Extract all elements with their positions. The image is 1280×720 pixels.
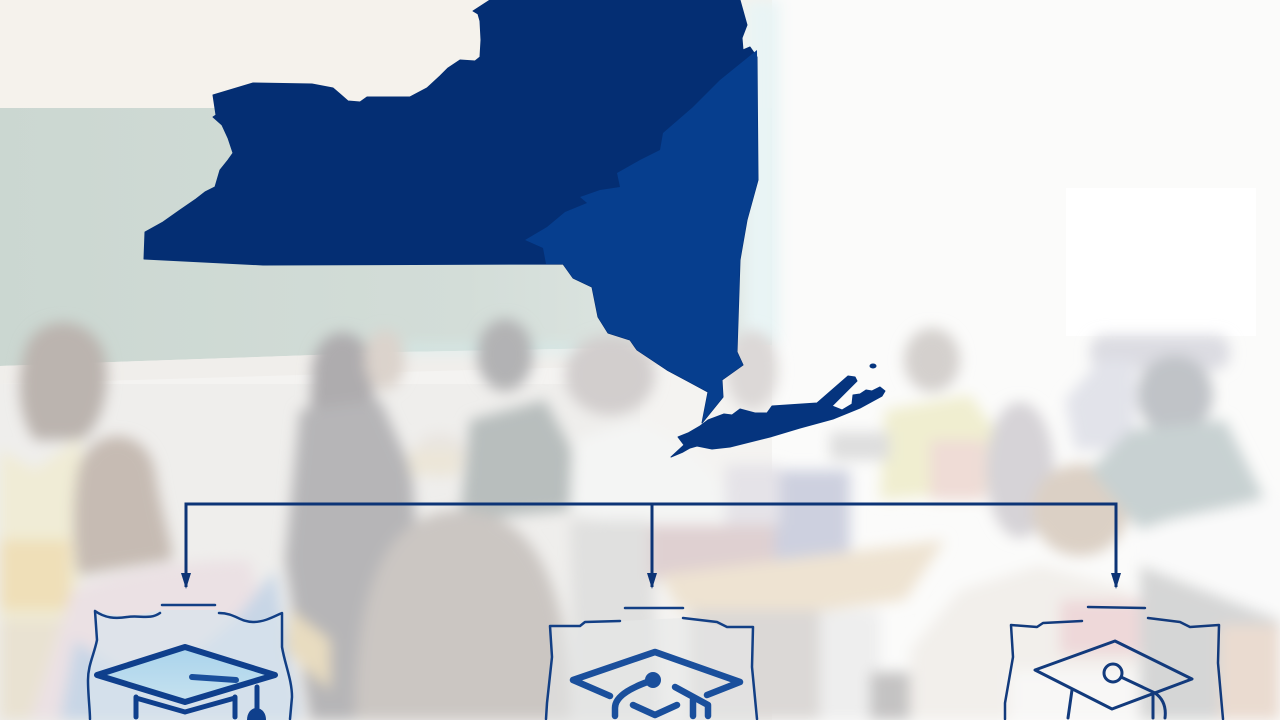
icon: shield with thin line cap [1005,607,1223,719]
small island [870,364,876,368]
eastern region (lighter blue) [525,50,758,423]
cap and face [573,652,740,716]
cap outline [1035,641,1192,718]
shield outline [546,608,757,719]
icon: shield with filled graduation cap [88,605,292,720]
shield outline [88,605,292,719]
map: New York State [144,0,885,457]
shield tint [546,618,757,720]
long island [671,376,885,457]
shield outline [1005,607,1223,719]
icon: shield with outlined chevron cap and student [546,608,757,720]
cap [97,647,275,702]
shield tint [88,610,292,720]
upstate region (dark blue) with hudson and coast outline [144,0,758,423]
connector arrows from map to three icons [181,504,1121,589]
